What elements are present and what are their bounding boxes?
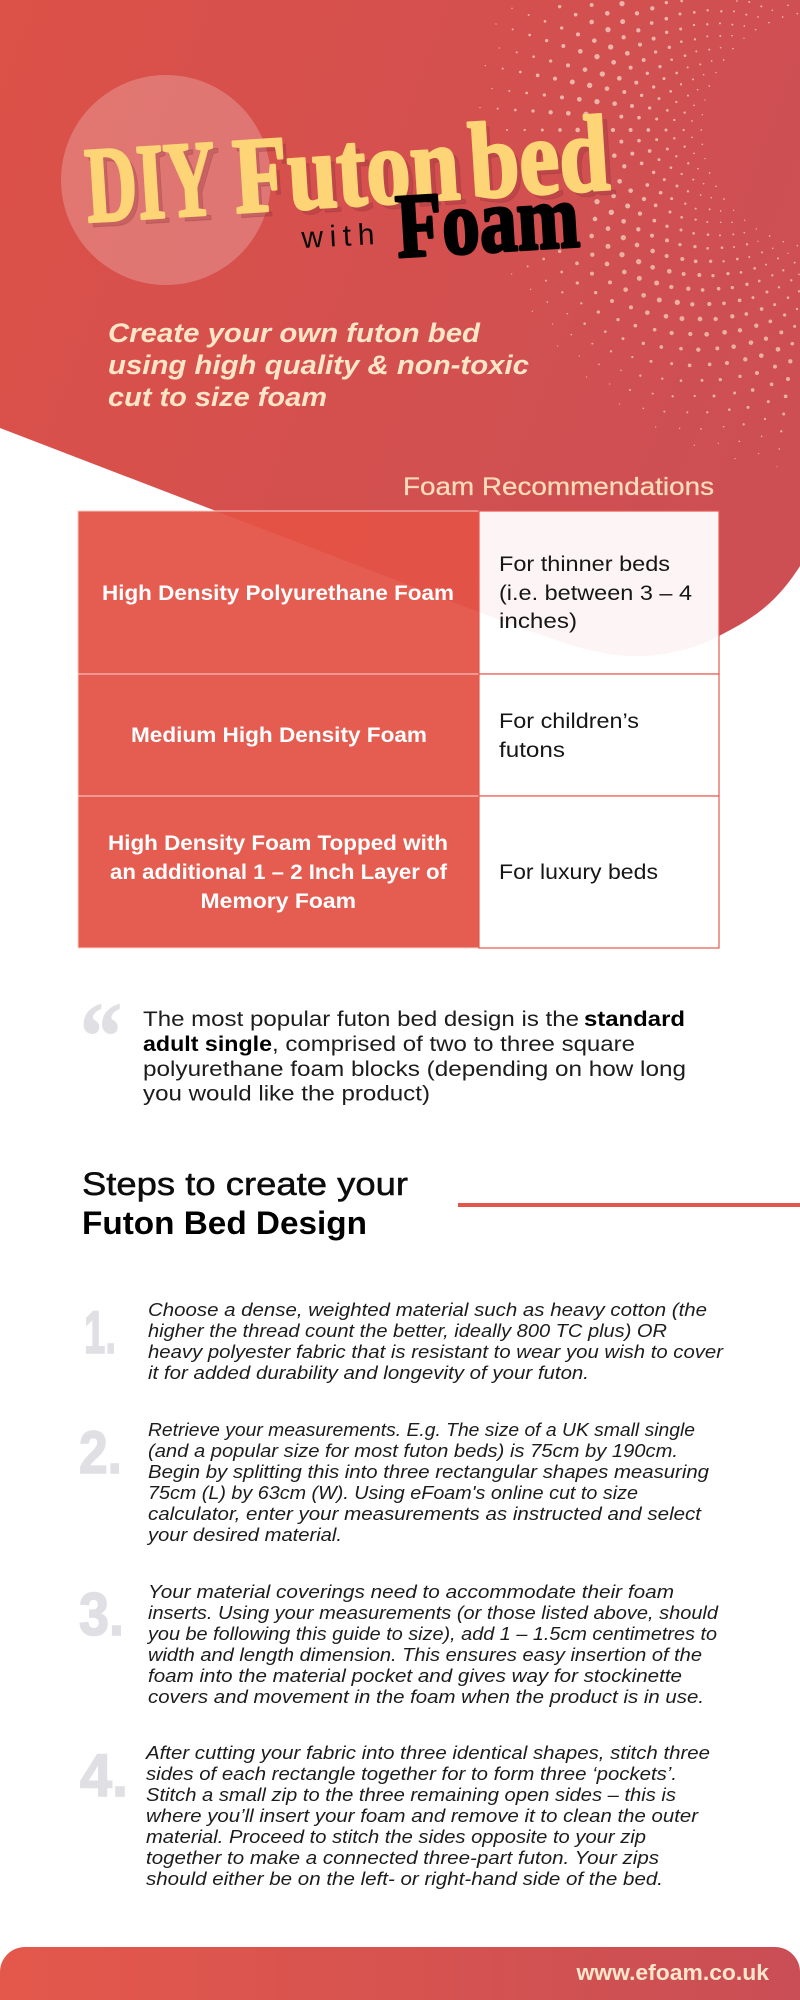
step 4 text: together to make a connected three-part futon. Your zips — [146, 1848, 659, 1868]
row 1: high density polyurethane foam: High Density Polyurethane Foam — [102, 582, 454, 605]
step 4 text — [145, 1743, 710, 1889]
row 2: medium high density foam — [78, 674, 719, 796]
step 4 text: sides of each rectangle together for to form three ‘pockets’. — [146, 1764, 677, 1784]
halftone dot pattern lower — [511, 232, 800, 467]
row 3: high density foam topped with memory foam: Memory Foam — [200, 890, 356, 913]
step 2 text: (and a popular size for most futon beds) is 75cm by 190cm. — [148, 1441, 678, 1461]
row 3: high density foam topped with memory foam: an additional 1 – 2 Inch Layer of — [110, 861, 448, 884]
quote text: polyurethane foam blocks (depending on how long — [143, 1057, 686, 1081]
step 4 text: should either be on the left- or right-hand side of the bed. — [146, 1869, 663, 1889]
step 1 text: higher the thread count the better, ideally 800 TC plus) OR — [148, 1321, 667, 1341]
step 3 text: inserts. Using your measurements (or those listed above, should — [148, 1603, 719, 1623]
step 2 text: calculator, enter your measurements as instructed and select — [148, 1504, 702, 1524]
step 2 text: your desired material. — [146, 1525, 342, 1545]
step 3 text: Your material coverings need to accommodate their foam — [148, 1582, 674, 1602]
title: DIY Futon bed: Futon — [234, 109, 469, 242]
step 1 text: it for added durability and longevity of your futon. — [148, 1363, 589, 1383]
row 3: high density foam topped with memory foam: High Density Foam Topped with — [108, 832, 448, 855]
row 2: medium high density foam: Medium High Density Foam — [131, 724, 427, 747]
step 1 text: Choose a dense, weighted material such as heavy cotton (the — [148, 1300, 707, 1320]
step 1 — [84, 1299, 724, 1383]
translucent circle behind title — [61, 75, 271, 285]
title: DIY Futon bed: bed — [469, 99, 618, 227]
step 2 text: 75cm (L) by 63cm (W). Using eFoam's online cut to size — [148, 1483, 638, 1503]
foam recommendations table — [78, 511, 719, 948]
quote text: , comprised of two to three square — [272, 1032, 635, 1056]
step 4 text: where you’ll insert your foam and remove it to clean the outer — [146, 1806, 699, 1826]
tagline: using high quality & non-toxic — [108, 350, 529, 380]
row 1: high density polyurethane foam — [78, 511, 719, 674]
website url: www.efoam.co.uk — [575, 1960, 770, 1985]
steps heading — [82, 1166, 408, 1241]
step 3 text: you be following this guide to size), add 1 – 1.5cm centimetres to — [146, 1624, 717, 1644]
step number 4: 4. — [80, 1742, 128, 1809]
quote text: standard — [584, 1007, 685, 1031]
step 2 text — [146, 1420, 709, 1545]
step 3 text: foam into the material pocket and gives way for stockinette — [148, 1666, 682, 1686]
tagline — [108, 318, 529, 412]
quote text — [143, 1007, 686, 1106]
step 3 text — [146, 1582, 719, 1707]
steps heading: Steps to create your — [82, 1166, 408, 1202]
step 3 text: covers and movement in the foam when the product is in use. — [148, 1687, 704, 1707]
steps heading: Futon Bed Design — [82, 1205, 367, 1241]
tagline: cut to size foam — [108, 382, 327, 412]
quote text: The most popular futon bed design is the — [143, 1007, 579, 1031]
footer bar — [0, 1947, 800, 2000]
step 1 text — [148, 1300, 724, 1383]
table heading: Foam Recommendations — [403, 473, 714, 501]
row 2: medium high density foam: futons — [499, 738, 565, 762]
halftone dot pattern upper — [479, 0, 798, 231]
title: DIY Futon bed — [82, 94, 618, 251]
step 2 text: Retrieve your measurements. E.g. The size of a UK small single — [148, 1420, 695, 1440]
quote text: adult single — [143, 1032, 272, 1056]
step number 2: 2. — [79, 1419, 122, 1486]
step 4 text: Stitch a small zip to the three remaining open sides – this is — [146, 1785, 676, 1805]
step 2 — [79, 1419, 709, 1545]
row 3: high density foam topped with memory foam — [78, 796, 719, 948]
title: DIY Futon bed: bed — [465, 94, 612, 222]
row 1: high density polyurethane foam: inches) — [499, 609, 577, 633]
heading accent line — [458, 1203, 800, 1207]
step 3 — [79, 1581, 719, 1707]
row 1: high density polyurethane foam: (i.e. between 3 – 4 — [499, 581, 692, 605]
icon: quotation mark: “ — [80, 982, 122, 1090]
row 3: high density foam topped with memory foam: For luxury beds — [499, 860, 658, 884]
header background shape — [0, 0, 800, 656]
title: DIY Futon bed: DIY — [86, 124, 225, 251]
row 1: high density polyurethane foam: For thinner beds — [499, 552, 670, 576]
step number 1: 1. — [84, 1299, 116, 1366]
step 1 text: heavy polyester fabric that is resistant to wear you wish to cover — [148, 1342, 724, 1362]
step number 3: 3. — [79, 1581, 124, 1648]
title: DIY Futon bed: DIY — [82, 119, 219, 246]
step 4 — [80, 1742, 710, 1889]
step 3 text: width and length dimension. This ensures easy insertion of the — [148, 1645, 702, 1665]
step 4 text: After cutting your fabric into three identical shapes, stitch three — [145, 1743, 710, 1763]
step 4 text: material. Proceed to stitch the sides opposite to your zip — [146, 1827, 646, 1847]
row 2: medium high density foam: For children’s — [499, 709, 639, 733]
subtitle word: with: with — [300, 218, 375, 255]
tagline: Create your own futon bed — [108, 318, 481, 348]
subtitle word: Foam: Foam — [393, 165, 582, 277]
step 2 text: Begin by splitting this into three rectangular shapes measuring — [148, 1462, 709, 1482]
quote text: you would like the product) — [143, 1082, 430, 1106]
title: DIY Futon bed: Futon — [230, 104, 463, 237]
